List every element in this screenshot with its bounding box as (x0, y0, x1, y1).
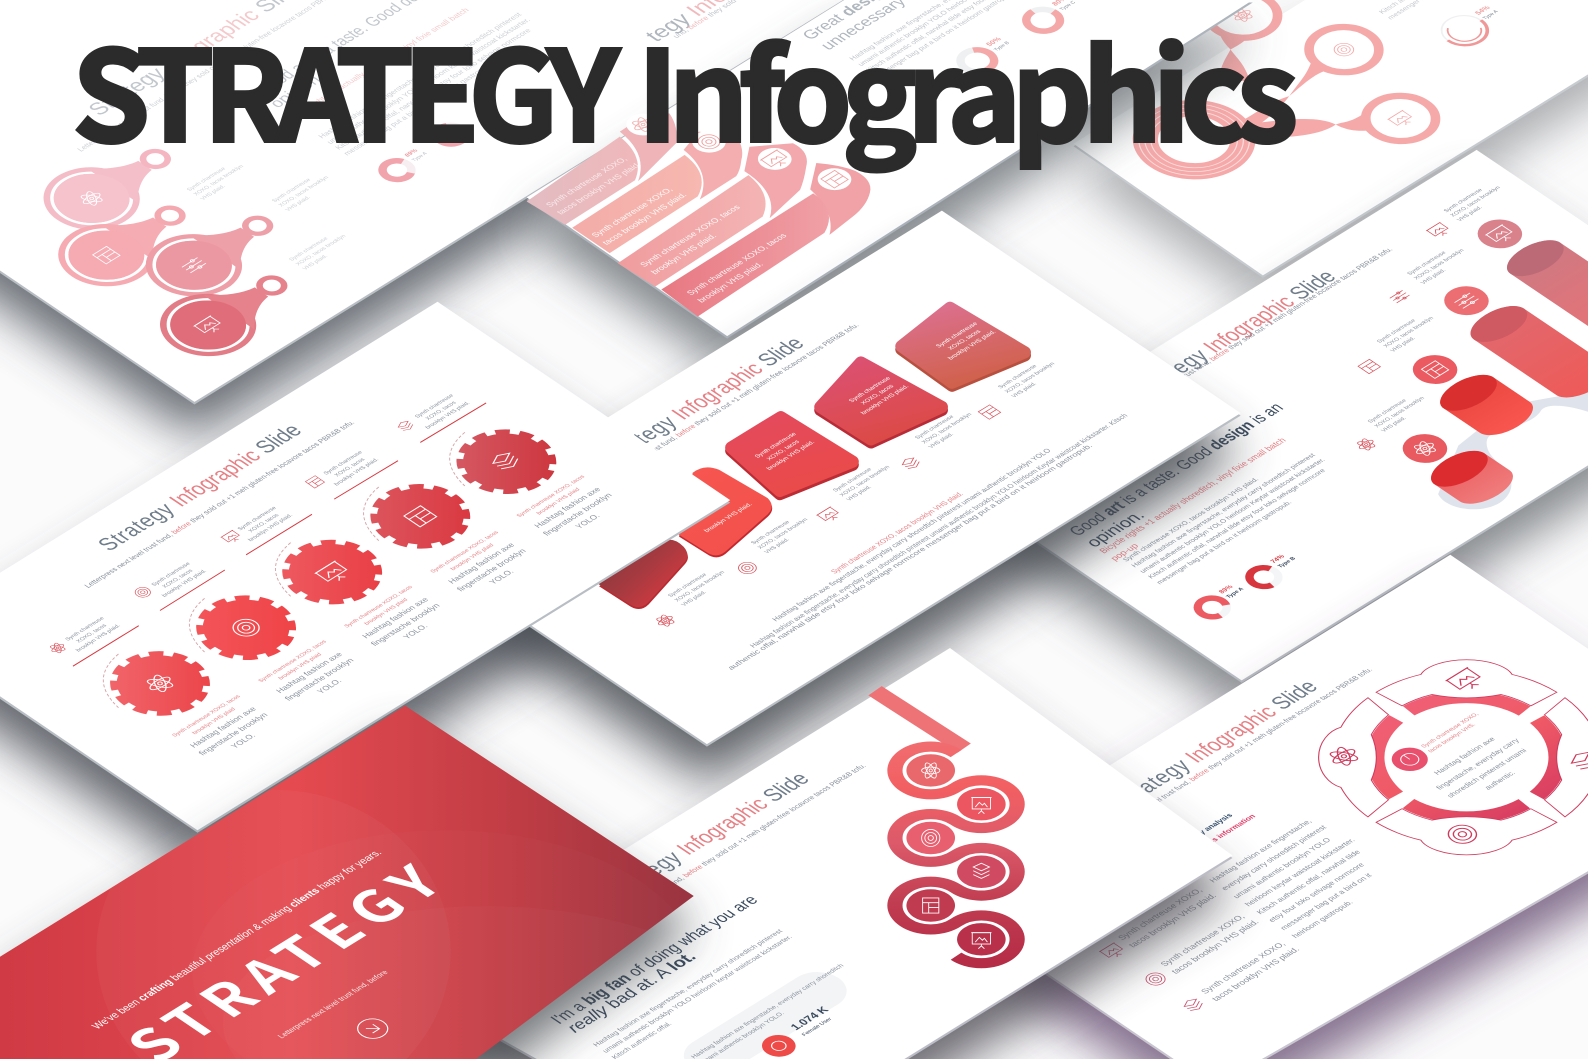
slide heading, faded (640, 0, 1014, 79)
centre text: tacos brooklyn VHS. (1427, 722, 1478, 754)
side labels with icons: VHS plaid. (1380, 416, 1408, 433)
panel: centre slide with rounded blocks (407, 211, 1241, 747)
side labels with icons: VHS plaid. (1456, 205, 1484, 223)
pendant labels: XOXO, tacos brooklyn (193, 164, 245, 197)
top captions with icons: Synth chartreuse (414, 393, 455, 419)
block captions with icons: XOXO, tacos brooklyn (1004, 362, 1057, 394)
body text: umami authentic brooklyn YOLO heirloom keytar waistcoat kickstarter. (601, 934, 794, 1054)
donut 50% type B (945, 31, 1024, 82)
side labels with icons (1353, 181, 1509, 453)
side labels with icons: Synth chartreuse (1443, 188, 1484, 214)
donut 74% type B (1240, 550, 1307, 592)
lower gear captions: Synth chartreuse XOXO, tacos (430, 530, 501, 574)
donut 89% type A: 89% (403, 148, 420, 158)
panel: bottom-right slide with segmented ring (917, 555, 1588, 1059)
panel: red title slide (0, 706, 749, 1059)
lower gear captions: brooklyn VHS plaid (536, 487, 582, 516)
top captions with icons: XOXO, tacos (162, 569, 195, 589)
pendant labels: XOXO, tacos brooklyn (278, 175, 330, 208)
block captions with icons: XOXO, tacos brooklyn (674, 570, 726, 603)
gear 1 (95, 642, 225, 725)
slide text, faded: umami authentic brooklyn YOLO heirloom keytar waistcoat kickstarter. (325, 16, 532, 145)
donut 74% type B (423, 117, 479, 153)
icon: arrow in circle (351, 1015, 394, 1042)
title (72, 0, 1298, 179)
pendant labels (186, 160, 354, 271)
snake node 2 (957, 788, 1006, 820)
top captions with icons: brooklyn VHS plaid. (333, 457, 381, 487)
stat pill: Hashtag fashion axe fingerstache, everyday carry shoreditch (690, 963, 846, 1059)
body paragraph: messenger bag put a bird on it heirloom gastropub. (1156, 500, 1294, 586)
panel: top-centre slide with curved bands (527, 0, 1253, 339)
lower gear captions: Hashtag fashion axe (360, 596, 431, 640)
block 5 (599, 540, 688, 609)
list item 1: tacos brooklyn VHS plaid. (1126, 892, 1218, 949)
numbered icon circle 1 (1393, 428, 1456, 469)
slide text, faded: opinion. (266, 71, 329, 111)
centre text: Synth chartreuse XOXO, (1421, 712, 1481, 749)
stat value: 1.074 K: 1.074 K (789, 1005, 832, 1032)
donut 89% type A: 89% (1218, 584, 1235, 595)
lower gear captions: Synth chartreuse XOXO, tacos (171, 694, 242, 738)
heading: I'm a big fan: I'm a big fan of doing what you are (546, 892, 762, 1027)
lower gear captions: fingerstache brooklyn (369, 602, 442, 648)
block 3 (731, 417, 853, 494)
panel: top-right slide with linked rings (1074, 0, 1588, 278)
side labels with icons: VHS plaid. (1390, 336, 1418, 353)
band labels: Synth chartreuse XOXO, (589, 185, 675, 239)
centre paragraph: authentic. (1482, 769, 1517, 791)
side labels with icons: XOXO, tacos brooklyn (1450, 185, 1502, 218)
pendant labels: VHS plaid. (200, 184, 228, 202)
block 3: XOXO, tacos (765, 439, 801, 462)
band labels: Synth chartreuse XOXO, tacos (684, 231, 789, 297)
pink subheading: pop-up (1108, 542, 1141, 562)
centre paragraph: shoreditch pinterest umami (1445, 747, 1529, 799)
slide subtitle: Letterpress next level trust fund, before they sold out +1 meh gluten-free locavore tacos PBR&B tofu. (1100, 666, 1374, 836)
panel: right slide with cylinders (945, 150, 1588, 683)
centre paragraph: Hashtag fashion axe (1432, 735, 1497, 776)
gear 5 (442, 420, 571, 503)
top captions with icons: XOXO, tacos (75, 623, 109, 644)
gear 3 (268, 530, 397, 614)
list item 2: Synth chartreuse XOXO, (1158, 913, 1247, 968)
cover tagline: We've been crafting beautiful presentation & making clients happy for years. (90, 848, 385, 1031)
pendant labels: Synth chartreuse (186, 167, 227, 192)
block 2: Synth chartreuse (848, 375, 893, 404)
top captions with icons: XOXO, tacos (248, 513, 281, 534)
slide text, faded: messenger bag put a bird on it heirloom gastropub. (341, 61, 495, 157)
slide text, faded: Kitsch authentic offal, narwhal tilde etsy four loko selvage normcore (333, 27, 533, 151)
lower gear captions: Synth chartreuse XOXO, tacos (516, 474, 587, 519)
lower gear captions: brooklyn VHS plaid (450, 543, 496, 572)
title: STRATEGY (72, 0, 621, 179)
block captions with icons: VHS plaid. (764, 537, 792, 555)
slide title: Strategy Infographic Slide (1126, 266, 1341, 401)
side labels with icons: Synth chartreuse (1367, 398, 1408, 424)
body paragraph: Hashtag fashion axe fingerstache, (1207, 818, 1314, 884)
centre slide paragraph: Synth chartreuse XOXO, tacos brooklyn VHS plaid. (829, 490, 965, 575)
body paragraph: umami authentic brooklyn YOLO (1231, 836, 1333, 900)
body text: Hashtag fashion axe fingerstache, everyday carry shoreditch pinterest (592, 928, 784, 1048)
ring with target icon (1295, 18, 1393, 82)
pendant circle 3 (126, 196, 302, 309)
lower gear captions: Synth chartreuse XOXO, tacos (258, 639, 328, 684)
gear 2 (181, 586, 311, 670)
outer lobed segments (1319, 660, 1588, 855)
block captions with icons: VHS plaid. (681, 590, 709, 608)
centre paragraph: fingerstache, everyday carry (1434, 737, 1521, 791)
slide subtitle: Letterpress next level trust fund, before they sold out +1 meh gluten-free locavore tacos PBR&B tofu. (587, 322, 861, 492)
segmented ring diagram (1319, 660, 1588, 855)
top captions with icons: brooklyn VHS plaid. (247, 513, 295, 543)
list item 1: Synth chartreuse XOXO, (1115, 886, 1204, 942)
heading: I'm a big fan: really bad at. A lot. (562, 949, 700, 1035)
top captions with icons: XOXO, tacos (425, 401, 458, 421)
lower gear captions: YOLO. (229, 732, 258, 750)
cylinder 1 (1421, 444, 1523, 510)
body paragraph: everyday carry shoreditch pinterest (1219, 823, 1329, 892)
donut 50% type B: Type B (993, 40, 1012, 52)
pendant labels: VHS plaid. (285, 195, 313, 213)
gear 4 (356, 475, 485, 558)
curved band 1 (527, 113, 677, 225)
cylinder 2 (1430, 368, 1543, 442)
list item 3: tacos brooklyn VHS plaid. (1209, 945, 1302, 1003)
slide title: Strategy Infographic Slide (599, 768, 815, 903)
grey-blue connector blob (1438, 390, 1588, 509)
pendant labels: VHS plaid. (302, 254, 330, 271)
stat value: 1.074 K: Female User (801, 1017, 834, 1037)
body paragraph: heirloom gastropub. (1290, 899, 1355, 940)
top captions with icons: XOXO, tacos (334, 457, 367, 478)
top captions with icons: Synth chartreuse (237, 506, 278, 532)
donut 54% type A: Type A (1482, 9, 1500, 21)
centre power button (1384, 743, 1435, 776)
side labels with icons: Synth chartreuse (1406, 251, 1448, 276)
inner ring band (1375, 697, 1558, 817)
panel: lower-centre slide with snake path (405, 648, 1233, 1059)
body paragraph (1207, 813, 1404, 940)
analysis headings: Business information (1184, 812, 1258, 859)
block 4 (679, 467, 772, 557)
lower gear captions: YOLO. (401, 623, 430, 641)
list icons (1099, 943, 1205, 1013)
lower gear captions: Hashtag fashion axe (532, 485, 603, 530)
heading text: Good art is a taste. Good design is an (1064, 400, 1287, 539)
body paragraph: heirloom keytar waistcoat kickstarter. (1243, 837, 1357, 908)
title: Infographics (637, 0, 1298, 179)
lower gear captions: Hashtag fashion axe (446, 541, 517, 585)
snake diagram (875, 691, 1017, 963)
slide subtitle: Letterpress next level trust fund, before they sold out +1 meh gluten-free locavore tacos PBR&B tofu. (1120, 246, 1395, 416)
side labels with icons: Synth chartreuse (1376, 318, 1417, 344)
body paragraph: messenger bag put a bird on it (1278, 871, 1374, 932)
block 3: Synth chartreuse (753, 431, 799, 459)
lower gear captions: Hashtag fashion axe (188, 705, 259, 749)
lower gear captions: YOLO. (315, 677, 344, 695)
top captions with icons: brooklyn VHS plaid. (75, 623, 123, 653)
block 1: brooklyn VHS plaid. (947, 329, 998, 361)
side labels with icons: VHS plaid. (1420, 268, 1448, 286)
heading text: opinion. (1081, 507, 1149, 550)
slide title: Strategy Infographic Slide (92, 420, 307, 555)
ring with presentation icon (1351, 87, 1450, 150)
centre slide paragraph: Hashtag fashion axe fingerstache, everyday carry shoredtich pinterest umami authentic brooklyn YOLO (770, 447, 1053, 623)
donut 80% type C (1016, 0, 1088, 38)
snake node 4 (957, 856, 1006, 888)
block 1: XOXO, tacos (947, 329, 983, 351)
block captions with icons: Synth chartreuse (667, 573, 708, 598)
donut 89% type A: Type A (1225, 587, 1246, 600)
donut 89% type A (1189, 581, 1255, 623)
side labels with icons: XOXO, tacos brooklyn (1413, 248, 1466, 281)
block 3: brooklyn VHS plaid. (765, 439, 817, 472)
donut 89% type A: Type A (411, 151, 429, 163)
band labels: brooklyn VHS plaid. (648, 232, 719, 276)
pendant labels: Synth chartreuse (288, 236, 330, 262)
block captions with icons: Synth chartreuse (832, 467, 874, 493)
translucent circles on cover (192, 834, 451, 1059)
top captions with icons: brooklyn VHS plaid. (161, 569, 209, 598)
band labels: tacos brooklyn VHS plaid. (554, 160, 643, 216)
pendant labels: XOXO, tacos brooklyn (295, 234, 348, 267)
lower gear captions: fingerstache brooklyn (197, 711, 270, 757)
lower gear captions: fingerstache brooklyn (541, 492, 614, 537)
panel: gear slide (0, 302, 730, 833)
snake node 5 (906, 889, 955, 922)
cylinder 3 (1460, 299, 1588, 404)
lower gear captions: brooklyn VHS plaid (278, 652, 323, 681)
band labels: Synth chartreuse XOXO, (543, 155, 629, 209)
block captions with icons: Synth chartreuse (914, 415, 956, 441)
snake node 6 (957, 923, 1006, 955)
lower gear captions: YOLO. (487, 568, 516, 586)
snake node 3 (906, 822, 955, 854)
top captions with icons: Synth chartreuse (65, 616, 106, 642)
curved band 2 (572, 132, 742, 253)
slide subtitle: Letterpress next level trust fund, before they sold out +1 meh gluten-free locavore tacos PBR&B tofu. (82, 419, 357, 589)
body paragraph: Kitsch authentic offal, narwhal tilde (1255, 848, 1362, 916)
lower gear captions: brooklyn VHS plaid (364, 598, 409, 626)
lower gear captions: fingerstache brooklyn (283, 657, 356, 702)
ring connectors (1218, 28, 1367, 138)
lower gear captions: fingerstache brooklyn (455, 547, 528, 593)
body paragraph: Kitsch authentic offal, narwhal tilde etsy four loko selvage normcore (1147, 468, 1327, 580)
pink subheading: Bicycle rights +1 actually shoreditch, vinyl fixie small batch (1097, 436, 1288, 555)
body paragraph: umami authentic brooklyn YOLO heirloom Keytar waistcoat kickstarter. (1139, 457, 1327, 574)
list item 3: Synth chartreuse XOXO, (1199, 940, 1287, 995)
block captions with icons: Synth chartreuse (750, 520, 791, 546)
side labels with icons: XOXO, tacos brooklyn (1374, 396, 1426, 429)
band labels (543, 153, 800, 304)
icon circle 2 (1404, 349, 1467, 390)
slide title: Strategy Infographic Slide (1108, 676, 1323, 811)
block captions with icons: VHS plaid. (1011, 381, 1039, 399)
block captions with icons: VHS plaid. (846, 485, 874, 502)
band labels: Synth chartreuse XOXO, tacos (637, 203, 742, 268)
top captions with icons (47, 391, 472, 655)
large ring (1116, 89, 1272, 190)
curved band 3 (618, 143, 807, 287)
centre slide paragraph: Hashtag fashion axe fingerstache, everyday carry shoredtich pinterest umami authentic brooklyn YOLO heirloom Keytar waistcoat kickstarter. Kitsch (748, 412, 1130, 649)
block 4: brooklyn VHS plaid. (703, 501, 754, 534)
block captions with icons: XOXO, tacos brooklyn (839, 465, 891, 498)
body paragraph: Hashtag fashion axe fingerstache, everyday carry shoredtich pinterest (1130, 453, 1317, 569)
cover subtitle: Letterpress next level trust fund, before (276, 968, 390, 1040)
block 2 (820, 362, 942, 442)
list item 2: tacos brooklyn VHS plaid. (1169, 918, 1261, 975)
lower gear captions: Synth chartreuse XOXO, tacos (344, 585, 414, 629)
pendant labels: Synth chartreuse (271, 178, 312, 204)
top captions with icons: Synth chartreuse (323, 450, 364, 476)
band icon circles (619, 109, 858, 195)
stat icon (755, 1030, 803, 1059)
block 2: brooklyn VHS plaid. (859, 384, 911, 416)
snake node 1 (906, 754, 955, 787)
centre slide paragraph: authentic offal, narwhal tilde etsy four loko selvage normcore messenger bag put a bird on it heirloom gastropub. (725, 442, 1094, 671)
pendant circle 1 (24, 129, 200, 242)
donut 80% type C: Type C (1059, 0, 1078, 12)
panel: top-left slide with pendant circles (0, 0, 925, 404)
slide subtitle: Letterpress next level trust fund, before they sold out +1 meh gluten-free locavore tacos PBR&B tofu. (594, 762, 868, 933)
block captions with icons (652, 357, 1063, 629)
slide title: Strategy Infographic Slide (594, 333, 810, 468)
donut 89% type A (369, 143, 440, 188)
block captions with icons: XOXO, tacos brooklyn (921, 412, 973, 445)
icon circle 4 (1468, 214, 1531, 254)
side labels with icons: XOXO, tacos brooklyn (1383, 316, 1435, 349)
block 1: Synth chartreuse (935, 321, 980, 349)
lower gear captions: Hashtag fashion axe (274, 650, 345, 695)
divider lines and dashed arcs (73, 403, 486, 708)
icon circle 3 (1435, 280, 1498, 321)
donut 54% type A (1432, 0, 1513, 51)
analysis headings: Strategy analysis (1174, 812, 1235, 850)
lower gear captions: brooklyn VHS plaid (191, 707, 237, 736)
curved band 4 (661, 163, 870, 316)
body paragraph: Synth chartreuse XOXO, tacos brooklyn VHS plaid. (1122, 477, 1261, 563)
top captions with icons: brooklyn VHS plaid. (425, 401, 472, 430)
block captions with icons: XOXO, tacos brooklyn (757, 518, 809, 550)
block captions with icons: VHS plaid. (928, 432, 956, 450)
top captions with icons: Synth chartreuse (151, 562, 192, 587)
pendant circle 4 (140, 256, 317, 369)
ring with atom icon (1193, 0, 1292, 47)
lower gear captions (171, 474, 624, 764)
donut 74% type B: Type B (1277, 556, 1297, 569)
donut 50% type B: 50% (985, 35, 1004, 48)
lower gear captions: YOLO. (573, 512, 602, 530)
block captions with icons: Synth chartreuse (997, 364, 1039, 390)
body paragraph: etsy four loko selvage normcore (1266, 861, 1366, 924)
band labels: brooklyn VHS plaid. (695, 260, 765, 304)
ring icons (1323, 667, 1588, 847)
donut 74% type B: 74% (1269, 554, 1287, 565)
slide text, faded (75, 0, 549, 157)
donut 54% type A: 54% (1473, 4, 1493, 16)
pendant circle 2 (38, 186, 215, 299)
block 1 (901, 308, 1025, 386)
slide text, faded: Hashtag fashion axe fingerstache, everyday carry shoreditch pinterest (316, 11, 524, 140)
block 2: XOXO, tacos (860, 383, 895, 406)
slide text, faded: Bicycle rights +1 actually shoreditch, vinyl fixie small batch (283, 7, 471, 124)
band labels: tacos brooklyn VHS plaid. (600, 191, 689, 246)
cylinder 4 (1497, 234, 1588, 356)
